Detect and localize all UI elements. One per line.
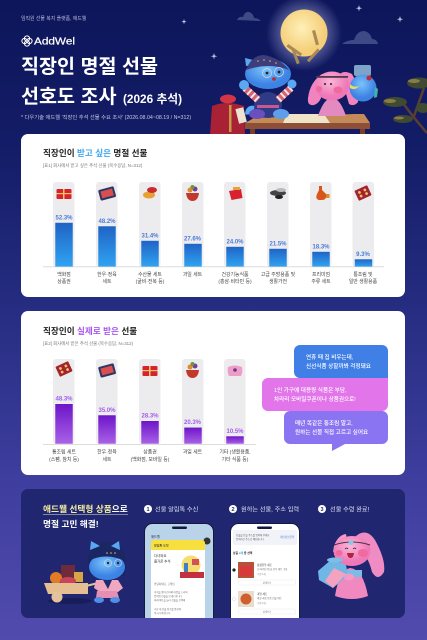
phone 2: gift selection: 상세보기 (263, 580, 271, 584)
heading (43, 503, 128, 529)
title: (2026 추석) (123, 92, 182, 106)
table (245, 114, 370, 135)
step 3 label (318, 505, 370, 514)
category labels (57, 271, 378, 285)
values (55, 396, 244, 435)
category labels: 한우·정육 (97, 271, 117, 278)
heading: 직장인이 실제로 받은 선물 (43, 325, 137, 336)
values: 35.0% (98, 408, 116, 414)
blue ball with gift box (350, 65, 378, 102)
values: 21.5% (269, 242, 287, 248)
phone 1: notification: 다녀와요 (154, 553, 166, 558)
category labels: 통조림 세트 (52, 448, 76, 456)
logo: AddWel (22, 36, 75, 48)
phone 2: gift selection: 상품 2개 중 선택 (233, 551, 253, 555)
phone 2: gift selection: 정성한우 세트 (257, 563, 273, 567)
category labels: 건강기능식품 (222, 271, 249, 278)
phone 2: gift selection: 수량 1개 (257, 601, 266, 605)
category labels: (홍삼·비타민 등) (218, 278, 252, 285)
panel: AddWel solution (21, 489, 405, 618)
category labels: 프리미엄 (312, 271, 330, 278)
bubble: pink (262, 378, 388, 417)
category labels: 일반 생활용품 (349, 278, 378, 285)
bubble: pink: 1인 가구에 대용량 식품은 부담, (274, 386, 347, 394)
phone 1: notification: 임직원 선물을 보내드립니다. (154, 594, 183, 598)
category labels: 과일 세트 (183, 271, 203, 278)
values: 31.4% (141, 234, 159, 240)
phone 2: gift selection: 과일 세트 (257, 592, 268, 596)
phone 2: gift selection: 프리미엄 1등급 한우 세트 구성 (257, 567, 287, 571)
step 3 label: 선물 수령 완료! (330, 506, 370, 514)
category labels: 주류 세트 (311, 278, 331, 285)
icons (56, 185, 372, 201)
phone 2: gift selection: 입력하신 주소로 배송됩니다. (236, 537, 265, 541)
phone 1: notification (144, 523, 214, 618)
values: 24.0% (226, 240, 244, 246)
values: 9.3% (356, 252, 370, 258)
phone 2: gift selection: 선물을 받을 주소를 입력해 주세요 (236, 533, 270, 537)
illustration: rabbit holding gift (318, 532, 384, 599)
values: 10.5% (226, 429, 244, 435)
bubble: purple: 매년 똑같은 통조림 말고, (295, 419, 353, 427)
category labels: (스팸, 참치 등) (49, 456, 79, 463)
heading: 직장인이 받고 싶은 명절 선물 (43, 147, 148, 158)
red wrapped gift (210, 94, 247, 135)
category labels: 기타 (생활용품, (219, 448, 251, 456)
logo: AddWel: AddWel (34, 36, 75, 48)
phone 1: notification: 아래 버튼을 눌러 선물을 선택해 (154, 598, 185, 602)
category labels: 한우·정육 (97, 448, 117, 456)
phone 2: gift selection (230, 523, 300, 618)
category labels: 세트 (102, 456, 112, 463)
panel: gifts employees actually received (21, 311, 405, 634)
bubble: purple: 원하는 선물 직접 고르고 싶어요 (295, 428, 368, 436)
category labels: 상품권 (57, 278, 71, 285)
phone 1: notification: 기한 내 선물 접수를 완료해 (154, 607, 181, 611)
phone 2: gift selection: 제철 과일 모음 선물 세트 (257, 596, 282, 600)
values: 20.3% (184, 420, 202, 426)
phone 1: notification: 추석을 맞아 감사의 마음을 드리며 (154, 590, 187, 594)
bar chart: received gifts (43, 345, 388, 463)
category labels: (굴비·전복 등) (136, 278, 165, 285)
bubble: pink: 차라리 모바일쿠폰이나 상품권으로! (274, 395, 356, 403)
phone 1: notification: 알림톡 도착 (154, 542, 169, 548)
category labels: 과일 세트 (183, 448, 203, 456)
title (21, 56, 182, 108)
category labels: 생활가전 (269, 278, 287, 285)
values (55, 216, 370, 258)
step 1 label: 1 (146, 507, 150, 513)
caption: [표2] 회사에서 받은 추석 선물 (복수응답, N=312) (43, 340, 134, 347)
phone 2: gift selection: 수량 1개 (257, 572, 266, 576)
header: tagline, logo and title (21, 15, 191, 121)
category labels: 상품권 (143, 448, 157, 456)
phone 2: gift selection: 개인정보입력 (280, 535, 295, 539)
step 2 label (229, 505, 299, 514)
illustration: cat with delivery cart (44, 541, 126, 604)
phone 1: notification: 주시기 바랍니다. (154, 611, 171, 615)
bar chart: wanted gifts (43, 182, 384, 285)
phone 1: notification: 즐거운 추석 (154, 558, 171, 564)
step 3 label: 3 (320, 507, 324, 513)
panel: gifts employees want (21, 134, 405, 297)
phone 1: notification: 안녕하세요, 고객님. (154, 582, 176, 586)
title: 직장인 명절 선물 (21, 56, 158, 78)
pink rabbit (308, 72, 358, 116)
category labels (49, 448, 251, 463)
heading: 애드웰 선택형 상품으로 (43, 503, 128, 514)
bubble: purple (284, 411, 388, 451)
values: 52.3% (55, 216, 73, 222)
bubble: blue (294, 345, 388, 386)
survey note: * 다우기술 애드웰 '직장인 추석 선물 수요 조사' (2026.08.04~08.19 / N=312) (21, 113, 191, 121)
caption: [표1] 회사에서 받고 싶은 추석 선물 (복수응답, N=312) (43, 162, 143, 169)
category labels: 통조림 및 (353, 271, 373, 278)
step 2 label: 2 (231, 507, 235, 513)
category labels: (백화점, 모바일 등) (131, 456, 170, 463)
bubble: blue: 신선식품 상할까봐 걱정돼요 (306, 362, 371, 370)
values: 48.2% (98, 219, 116, 225)
values: 28.3% (141, 414, 159, 420)
illustration: moon and night sky (181, 0, 403, 71)
blue cat in hat (239, 55, 296, 119)
step 1 label (144, 505, 199, 514)
speech bubbles (262, 345, 388, 451)
illustration: table, gift and characters (210, 55, 378, 135)
values: 18.3% (312, 244, 330, 250)
step 1 label: 선물 알림톡 수신 (155, 506, 199, 514)
illustration: pine tree (383, 78, 427, 133)
category labels: 고급 주방용품 및 (261, 271, 296, 278)
values: 48.3% (55, 396, 73, 402)
tagline: 임직원 선물 복지 플랫폼, 애드웰 (21, 15, 87, 22)
title: 선호도 조사 (21, 86, 117, 108)
step 2 label: 원하는 선물, 주소 입력 (241, 506, 299, 514)
category labels: 백화점 (57, 271, 71, 278)
phone 2: gift selection: 상세보기 (263, 610, 271, 614)
category labels: 수산물 세트 (138, 271, 162, 278)
category labels: 세트 (102, 278, 112, 285)
heading: 명절 고민 해결! (43, 518, 99, 529)
icons (55, 361, 242, 378)
phone 1: notification: 애드웰 (151, 534, 160, 539)
category labels: 기타 식품 등) (222, 456, 249, 463)
values: 27.6% (184, 236, 202, 242)
bubble: blue: 연휴 때 집 비우는데, (306, 353, 354, 361)
